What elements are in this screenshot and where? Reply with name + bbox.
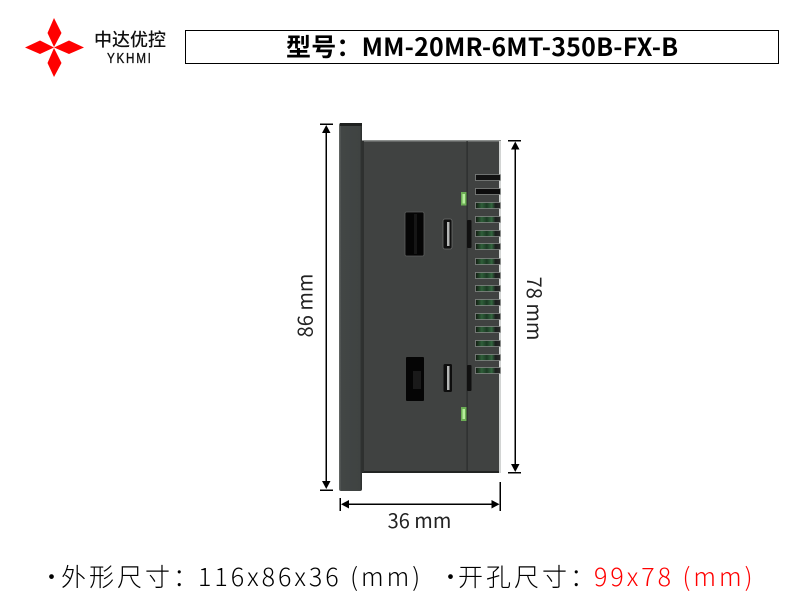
bottom dimensions text (39, 558, 755, 594)
label: 86 mm: 86 mm (290, 274, 318, 337)
upper LED (461, 192, 466, 206)
cutout size value: 99x78 (mm) (594, 558, 755, 594)
upper USB port (405, 212, 424, 256)
outer size value: 116x86x36 (mm) (198, 558, 423, 594)
label: 78 mm: 78 mm (521, 277, 550, 340)
icon: red four-point star (25, 18, 84, 77)
cutout size bullet: · (438, 558, 466, 594)
title: 型号：MM-20MR-6MT-350B-FX-B (286, 28, 678, 64)
label: 36 mm: 36 mm (388, 505, 451, 534)
outer size bullet: · (39, 558, 67, 594)
dimension: cutout height 78 mm (508, 140, 521, 474)
upper dark notch (467, 220, 472, 248)
lower small port (444, 364, 452, 392)
lower LED (461, 407, 466, 421)
front flange (339, 123, 362, 491)
dimension: height 86 mm (320, 124, 333, 491)
connector slots (476, 174, 500, 374)
logo name: 中达优控 (94, 26, 166, 52)
logo (25, 18, 166, 77)
logo latin name: YKHMI (107, 50, 153, 67)
lower dark notch (467, 365, 472, 391)
housing body (362, 140, 501, 473)
device (339, 123, 501, 491)
cutout size label: 开孔尺寸： (458, 558, 598, 594)
outer size: 外形尺寸： (61, 558, 201, 594)
lower USB port (406, 357, 424, 401)
upper small port (443, 219, 452, 249)
title box (185, 30, 779, 64)
dimension: depth 36 mm (340, 482, 501, 511)
